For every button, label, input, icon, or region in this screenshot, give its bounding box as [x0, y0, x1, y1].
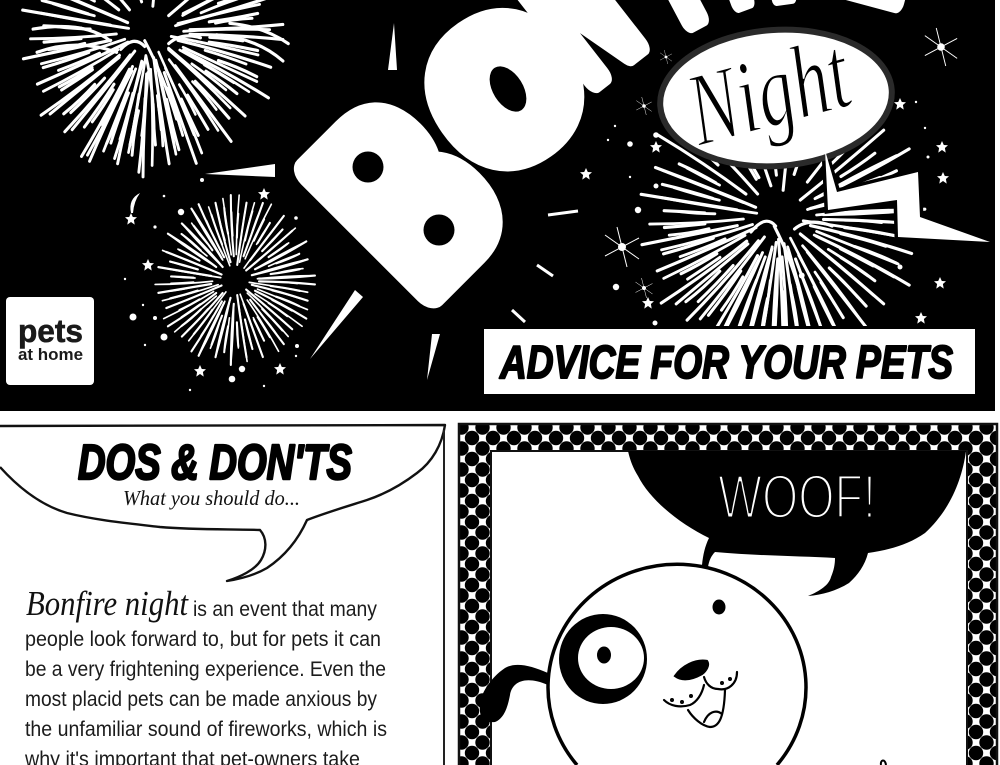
dog — [480, 564, 886, 765]
heading: DOS & DON'TS — [78, 436, 352, 490]
intro paragraph: the unfamiliar sound of fireworks, which is — [25, 718, 387, 741]
intro paragraph: Bonfire night — [26, 584, 189, 623]
intro paragraph: people look forward to, but for pets it can — [25, 628, 381, 651]
logo: pets at home — [6, 297, 94, 385]
firework: large top left — [0, 0, 298, 212]
eye — [559, 614, 647, 704]
stars and sparkles — [124, 28, 957, 391]
woof lettering: WOOF! — [718, 463, 876, 532]
intro paragraph: is an event that many — [193, 598, 377, 621]
head — [548, 564, 806, 765]
tail tip — [881, 760, 886, 765]
panel: black title banner — [0, 0, 995, 411]
intro paragraph: be a very frightening experience. Even the — [25, 658, 386, 681]
panel: dos and don'ts — [0, 425, 445, 765]
intro paragraph: most placid pets can be made anxious by — [25, 688, 377, 711]
letter B: B — [267, 58, 545, 336]
panel right edge — [443, 430, 445, 765]
polka-dot border — [459, 424, 997, 765]
Night lettering: Night — [675, 15, 863, 168]
panel: dog with polka-dot border — [459, 424, 997, 765]
logo: pets at home: at home — [18, 345, 83, 364]
intro paragraph — [24, 584, 387, 765]
firework: small lower left — [136, 174, 334, 386]
ear — [480, 665, 548, 722]
speech bubble: woof — [628, 451, 966, 596]
logo: pets at home: pets — [18, 313, 83, 349]
nose and mouth — [664, 661, 737, 727]
speech bubble: Night — [656, 15, 990, 242]
firework: large right — [640, 128, 926, 326]
streaks and comet trails — [130, 23, 578, 380]
speech bubble outline — [0, 425, 445, 581]
title: BONFIRE — [267, 0, 946, 336]
subheading: What you should do... — [123, 486, 300, 510]
forehead spot — [712, 600, 726, 614]
